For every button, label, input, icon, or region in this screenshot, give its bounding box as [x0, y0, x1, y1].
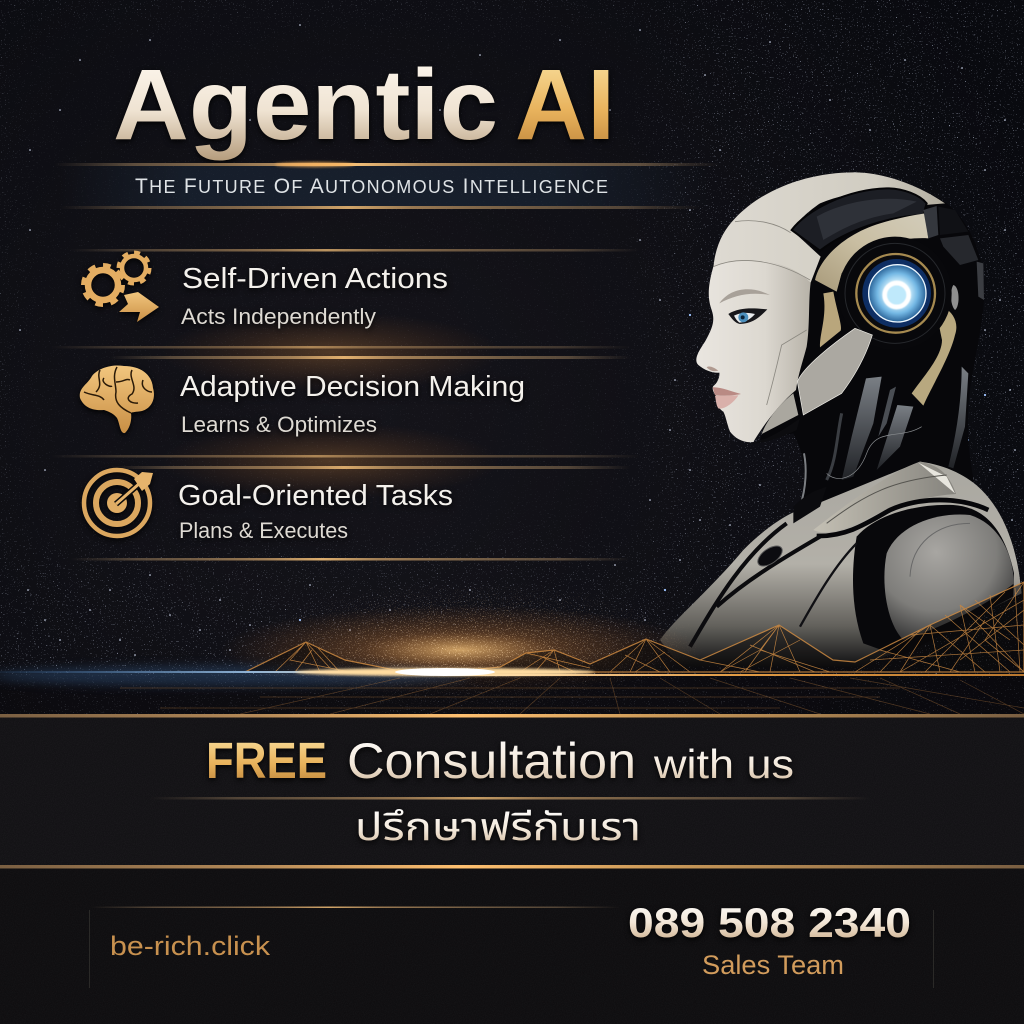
dark shoulder cavity [853, 505, 1014, 657]
feature: goal-oriented tasks: Goal-Oriented Tasks [178, 480, 453, 512]
icon: target with arrow [84, 470, 153, 536]
chest straps [690, 523, 820, 647]
visor panel [792, 188, 927, 251]
feature: self-driven actions [84, 252, 448, 329]
icon: gears and arrow [84, 252, 159, 322]
title: Agentic [113, 49, 498, 161]
feature: adaptive decision making: Learns & Optimizes [181, 412, 377, 437]
headline: Consultation [347, 733, 636, 789]
headline [206, 732, 794, 789]
neck strands [800, 367, 968, 507]
temple block [923, 206, 938, 238]
feature: self-driven actions: Acts Independently [181, 304, 376, 329]
eye [728, 308, 767, 324]
panel: contact footer [0, 869, 1024, 1024]
horizon glow and flare [0, 583, 1024, 714]
face [696, 260, 811, 442]
gold band [815, 213, 928, 292]
sales team: Sales Team [702, 950, 844, 980]
nostril [707, 367, 718, 371]
chest button [754, 542, 786, 570]
headline: with us [653, 741, 794, 787]
cheek plate [797, 328, 872, 415]
perspective floor grid [120, 678, 1024, 714]
rear panels [940, 235, 978, 265]
feature rules [50, 249, 640, 560]
wireframe mountains [245, 582, 1024, 672]
lips [713, 387, 741, 409]
subtitle with rules: THE FUTURE OF AUTONOMOUS INTELLIGENCE [135, 175, 608, 198]
back mechanical structure [760, 186, 984, 523]
collar plate [813, 462, 956, 532]
jaw plate [762, 393, 798, 434]
collar shadow band [817, 500, 988, 536]
background: starfield [0, 0, 1024, 714]
jaw shadow [750, 418, 800, 444]
shoulder sphere [884, 514, 1014, 640]
icon: brain [80, 365, 154, 433]
title: AI [515, 49, 615, 161]
feature: goal-oriented tasks [84, 470, 453, 543]
panel: call to action [0, 714, 1024, 868]
robot figure [660, 172, 1022, 667]
torso [660, 462, 1022, 667]
horizon light streak [0, 668, 1024, 676]
Thai headline: ปรึกษาฟรีกับเรา [355, 807, 641, 849]
brow [719, 289, 770, 303]
headline: FREE [206, 732, 327, 789]
face seams [713, 221, 810, 405]
skull [713, 172, 945, 283]
feature: self-driven actions: Self-Driven Actions [182, 263, 448, 295]
subtitle with rules [55, 162, 720, 209]
feature: goal-oriented tasks: Plans & Executes [179, 518, 348, 543]
website: be-rich.click [110, 931, 271, 961]
phone number: 089 508 2340 [628, 899, 911, 946]
feature: adaptive decision making [80, 365, 525, 437]
feature: adaptive decision making: Adaptive Decision Making [180, 371, 525, 403]
ear lens [838, 237, 952, 350]
